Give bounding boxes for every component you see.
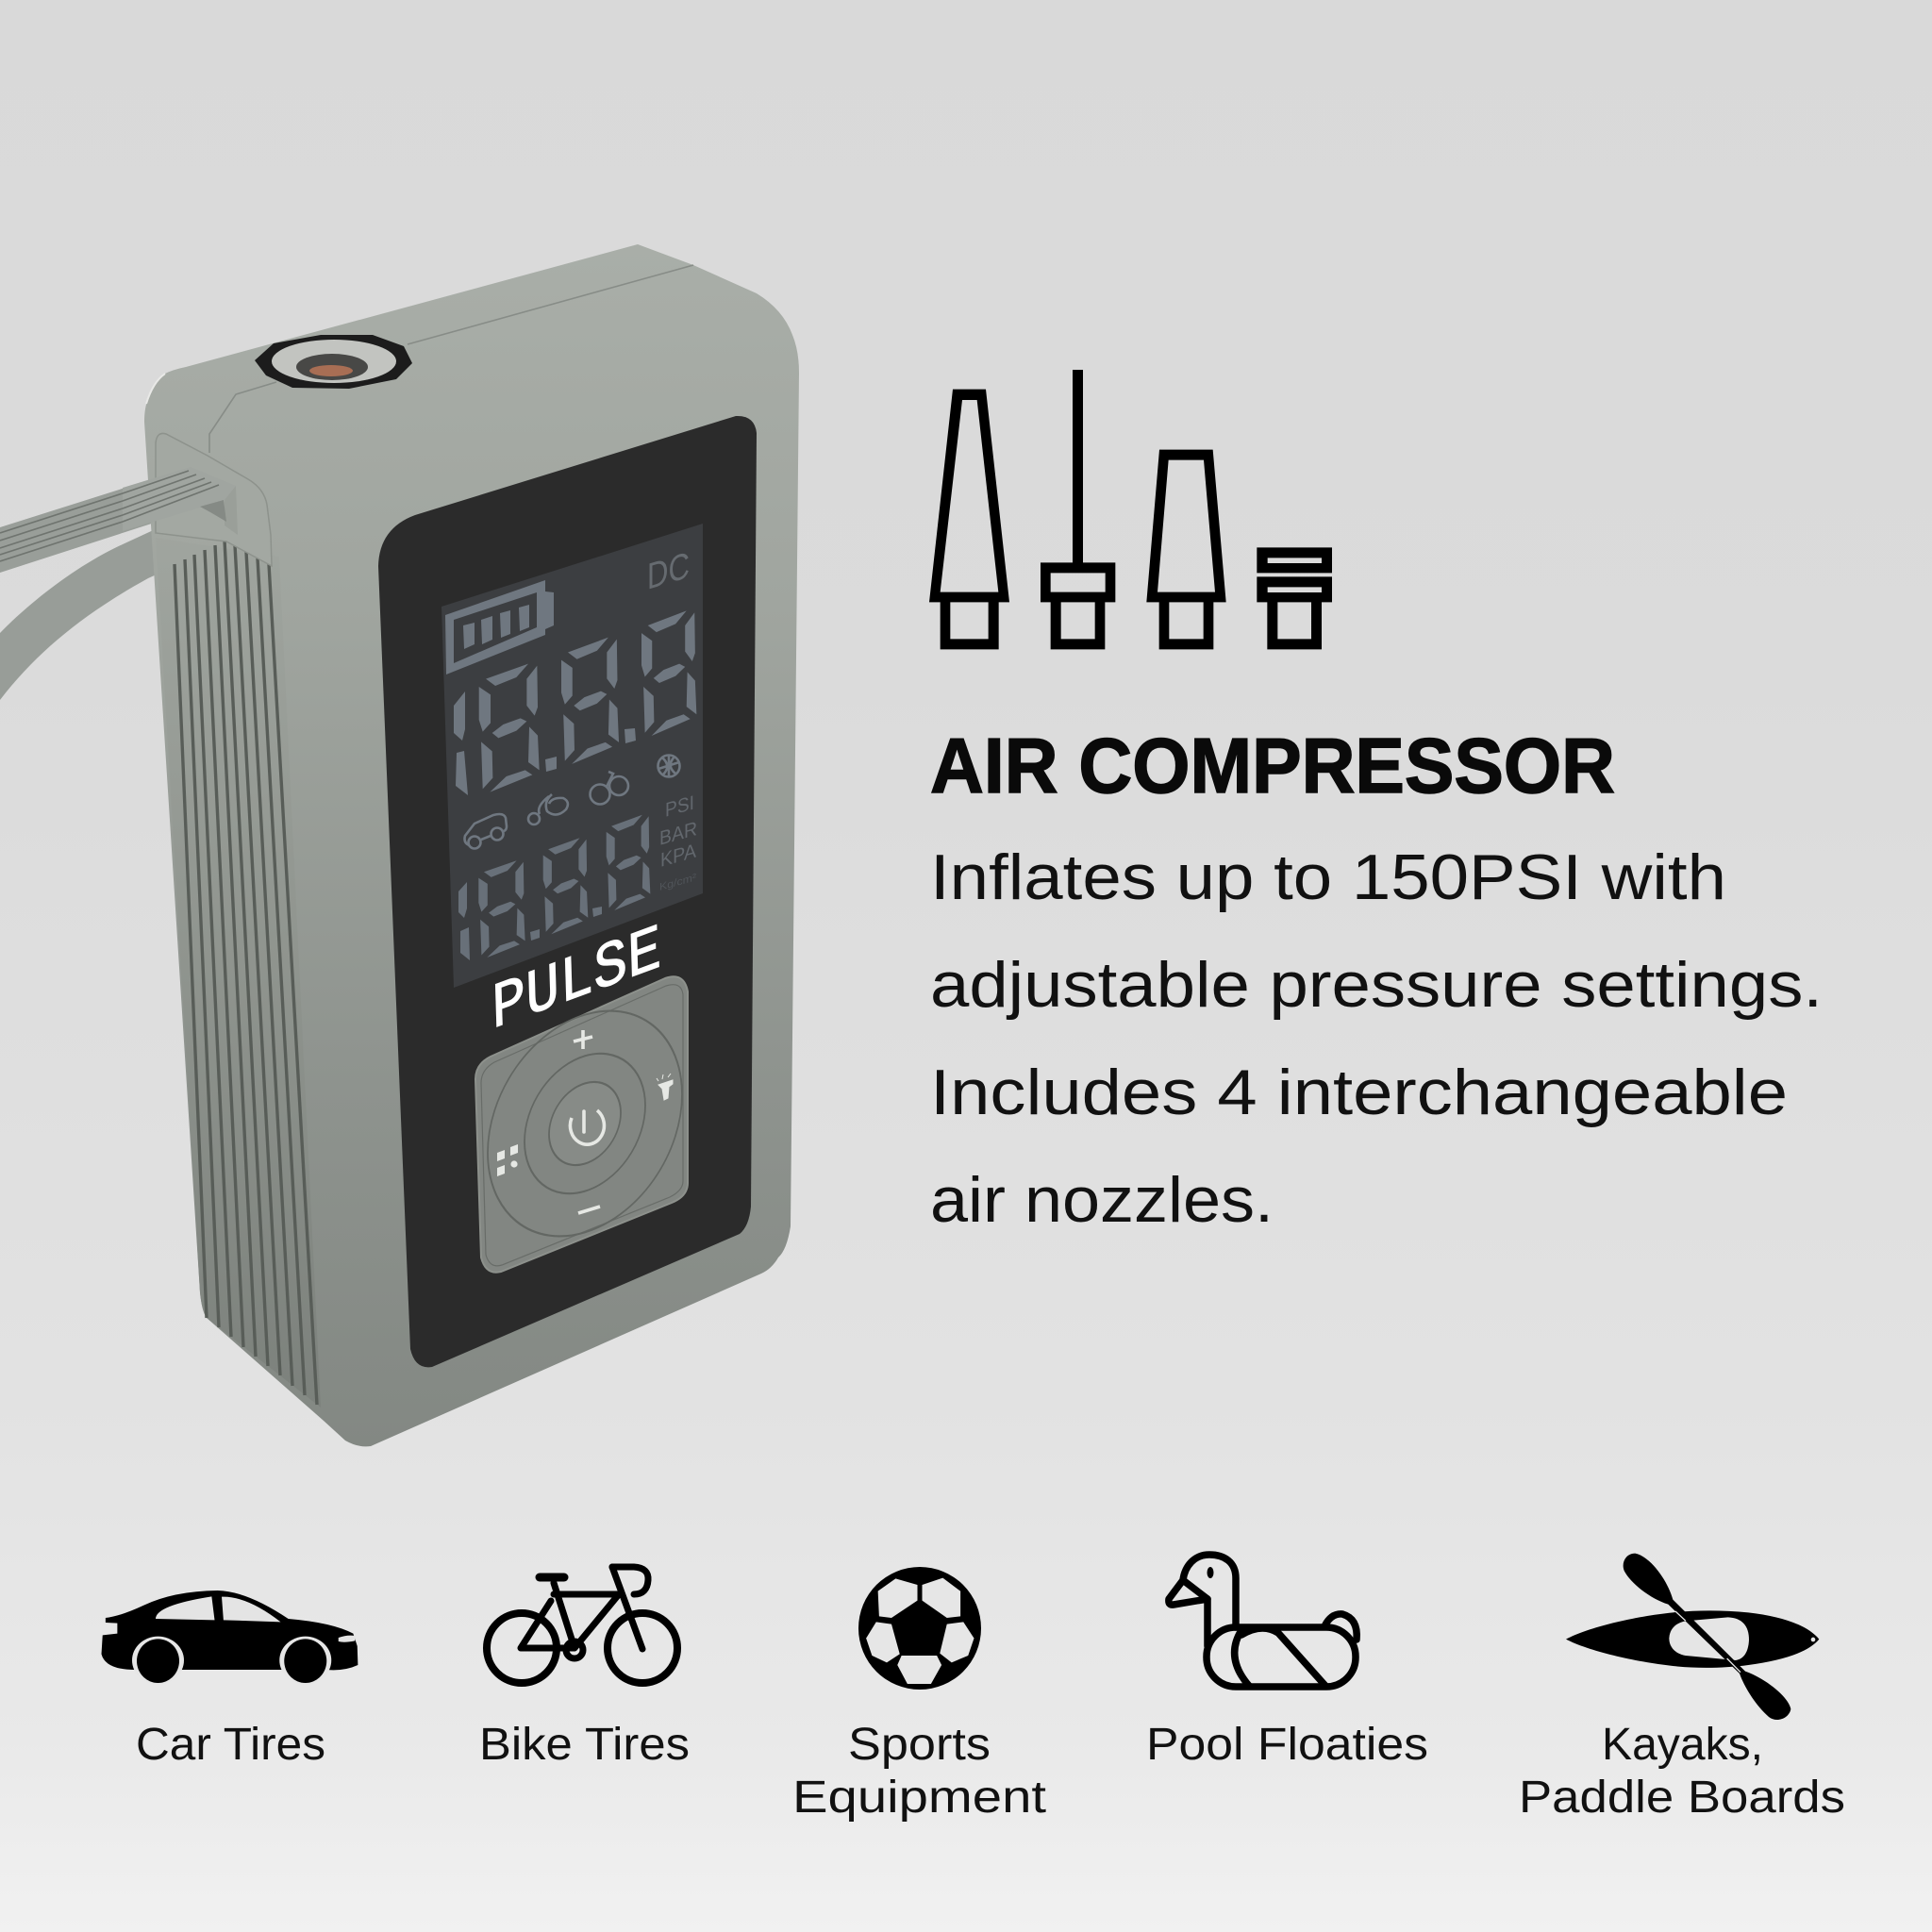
plus icon — [574, 1030, 592, 1049]
unit labels: KPA — [660, 840, 697, 872]
labels — [136, 1720, 1845, 1823]
description text — [930, 841, 1823, 1236]
lamp icon — [657, 1074, 673, 1100]
nozzle 4 — [1257, 547, 1332, 649]
icon: duck pool float — [1169, 1555, 1357, 1687]
icon: soccer ball — [858, 1567, 981, 1690]
text: DC: DC — [647, 544, 690, 598]
description text: Includes 4 interchangeable — [930, 1057, 1788, 1128]
ribbed side — [156, 538, 321, 1407]
unit labels: BAR — [659, 817, 697, 850]
corner highlight — [146, 374, 165, 404]
heading: AIR COMPRESSOR — [930, 722, 1615, 809]
top face seams — [209, 265, 693, 453]
description text: adjustable pressure settings. — [930, 949, 1823, 1021]
label: car tires: Car Tires — [136, 1720, 325, 1770]
icon: kayak with paddle — [1566, 1554, 1819, 1720]
battery icon — [445, 580, 554, 675]
flat hose cables — [0, 467, 238, 700]
label: pool floaties: Pool Floaties — [1146, 1720, 1428, 1770]
icon: four air nozzles — [929, 370, 1332, 649]
label: sports: Sports — [848, 1720, 991, 1770]
power icon — [570, 1110, 604, 1144]
unit labels: Kg/cm² — [659, 872, 696, 893]
nozzle 3 — [1146, 450, 1226, 649]
device body — [144, 244, 799, 1446]
nozzle 1 — [929, 390, 1009, 649]
nozzle 2 — [1041, 370, 1115, 649]
minus icon — [578, 1207, 600, 1213]
icon: bicycle — [487, 1567, 677, 1683]
unit labels: PSI — [665, 791, 694, 822]
cable connector — [0, 467, 238, 561]
digits: small row — [458, 815, 650, 960]
icons: car, scooter, bike, ball — [464, 755, 679, 849]
description text: air nozzles. — [930, 1164, 1274, 1236]
air port — [255, 335, 412, 389]
label: kayaks: Kayaks, — [1602, 1720, 1763, 1770]
label: bike tires: Bike Tires — [479, 1720, 690, 1770]
control keypad — [475, 976, 688, 1273]
unit labels — [659, 791, 697, 893]
label: equipment: Equipment — [792, 1773, 1046, 1823]
icon: car — [102, 1591, 358, 1684]
digits: large row — [454, 610, 696, 795]
description text: Inflates up to 150PSI with — [930, 841, 1726, 913]
black face panel — [378, 416, 757, 1367]
label: paddle boards: Paddle Boards — [1519, 1773, 1845, 1823]
brand: PULSE: PULSE — [491, 912, 662, 1048]
LCD panel — [441, 524, 703, 988]
mode dots icon — [497, 1144, 518, 1176]
product: air compressor device — [0, 244, 799, 1446]
cable recess — [156, 433, 272, 566]
